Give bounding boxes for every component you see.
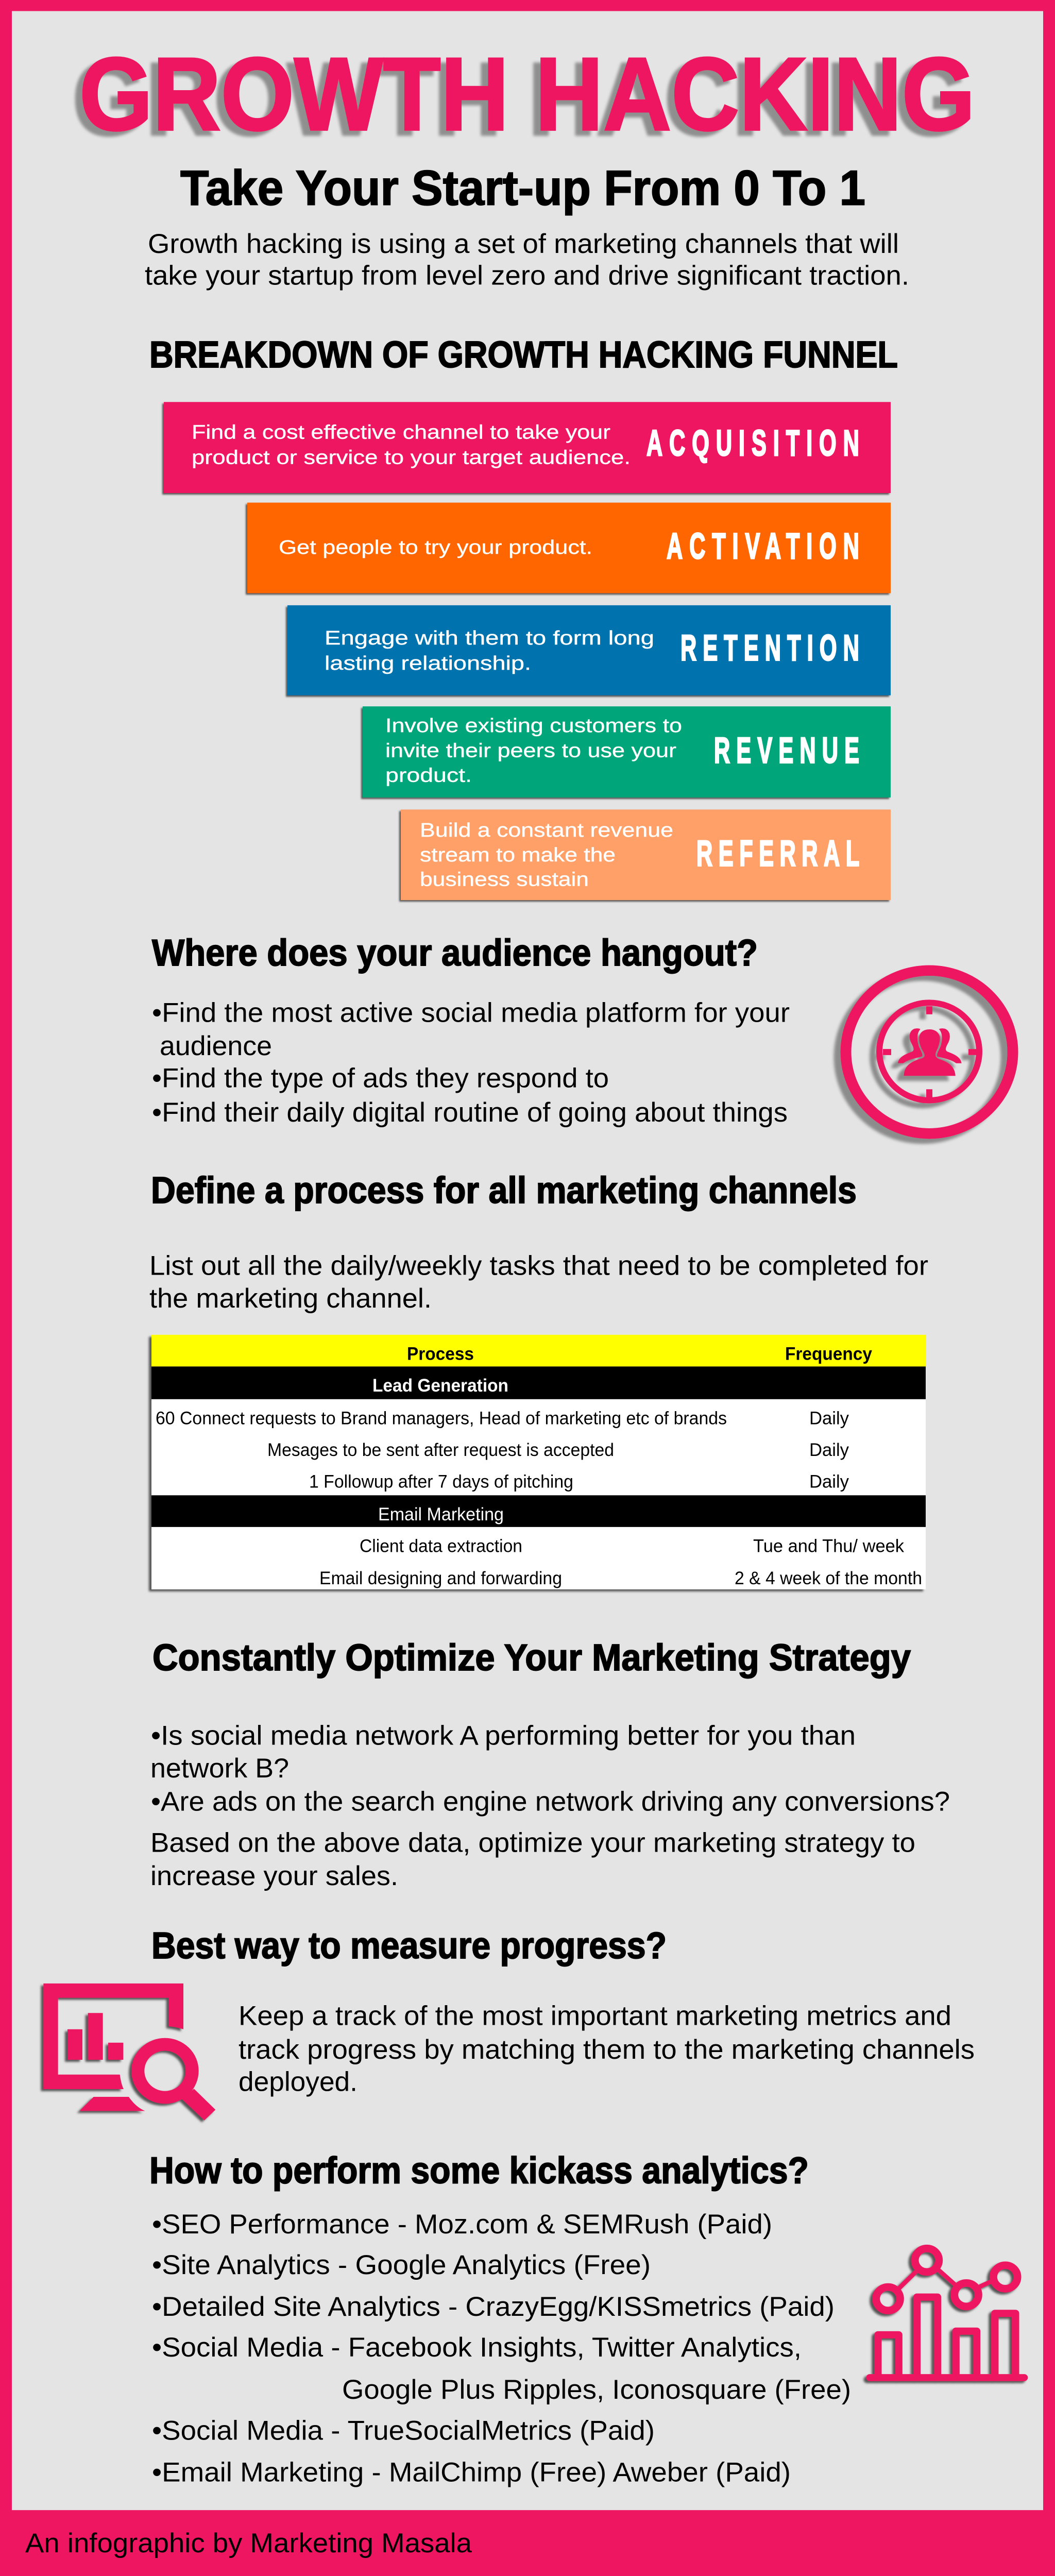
intro text: Growth hacking is using a set of marketing channels that will: [148, 229, 899, 259]
table rows: lead generation: 60 Connect requests to Brand managers, Head of marketing etc of brands: [156, 1408, 727, 1429]
funnel bar: acquisition: [164, 402, 891, 493]
table rows: lead generation: Daily: [809, 1471, 849, 1492]
measure progress text: Keep a track of the most important marketing metrics and: [239, 2001, 951, 2031]
funnel bar: retention: lasting relationship.: [325, 652, 531, 674]
table header row: Process: [407, 1344, 474, 1364]
heading: audience: Where does your audience hangout?: [152, 933, 758, 974]
table rows: email marketing: Email designing and forwarding: [319, 1568, 562, 1588]
analytics tool list: •SEO Performance - Moz.com & SEMRush (Paid): [152, 2210, 772, 2240]
measure progress text: track progress by matching them to the marketing channels: [239, 2035, 975, 2065]
audience bullet list: •Find the most active social media platform for your: [152, 998, 790, 1028]
table rows: email marketing: 2 & 4 week of the month: [735, 1568, 922, 1588]
funnel bar: activation: ACTIVATION: [667, 526, 859, 567]
heading: measure progress: Best way to measure progress?: [151, 1925, 667, 1967]
funnel bar: referral: Build a constant revenue: [420, 819, 673, 841]
funnel bar: referral: [401, 809, 891, 900]
funnel bar: revenue: product.: [385, 765, 472, 786]
analytics tool list: •Site Analytics - Google Analytics (Free): [152, 2250, 651, 2280]
table section: lead generation: Lead Generation: [372, 1376, 508, 1396]
analytics tool list: •Email Marketing - MailChimp (Free) Aweber (Paid): [152, 2458, 791, 2487]
measure progress text: [239, 2001, 975, 2097]
table rows: lead generation: 1 Followup after 7 days of pitching: [309, 1471, 573, 1492]
table header row: [151, 1335, 926, 1366]
audience bullet list: [152, 998, 790, 1128]
funnel bar: revenue: invite their peers to use your: [385, 740, 676, 762]
audience bullet list: •Find their daily digital routine of going about things: [152, 1097, 788, 1128]
heading: funnel breakdown: BREAKDOWN OF GROWTH HACKING FUNNEL: [149, 334, 898, 376]
process intro text: [149, 1251, 928, 1314]
table rows: lead generation: [156, 1408, 849, 1492]
heading: analytics: How to perform some kickass analytics?: [149, 2150, 809, 2191]
table rows: lead generation: Mesages to be sent after request is accepted: [267, 1440, 614, 1460]
table rows: email marketing: [319, 1536, 922, 1588]
funnel bar: referral: REFERRAL: [696, 834, 859, 874]
audience bullet list: •Find the type of ads they respond to: [152, 1063, 609, 1093]
table header row: Frequency: [785, 1344, 872, 1364]
heading: optimize: Constantly Optimize Your Marketing Strategy: [152, 1637, 911, 1679]
optimize text block: •Is social media network A performing better for you than: [151, 1721, 856, 1751]
measure progress text: deployed.: [239, 2067, 358, 2097]
intro text: [145, 229, 909, 291]
icon: audience target: [846, 971, 1013, 1133]
funnel bar: referral: stream to make the: [420, 844, 616, 866]
funnel bar: retention: Engage with them to form long: [325, 627, 654, 649]
table rows: lead generation: Daily: [809, 1408, 849, 1429]
subtitle: Take Your Start-up From 0 To 1: [180, 160, 865, 215]
process intro text: List out all the daily/weekly tasks that need to be completed for: [149, 1251, 928, 1281]
optimize text block: Based on the above data, optimize your marketing strategy to: [150, 1828, 915, 1858]
optimize text block: [150, 1721, 950, 1891]
funnel bar: activation: [247, 503, 891, 593]
table rows: email marketing: Client data extraction: [360, 1536, 522, 1556]
optimize text block: network B?: [150, 1754, 289, 1784]
funnel bar: acquisition: product or service to your target audience.: [192, 447, 631, 468]
analytics tool list: •Social Media - Facebook Insights, Twitter Analytics,: [152, 2333, 802, 2363]
funnel bar: acquisition: Find a cost effective channel to take your: [192, 421, 610, 443]
heading: process: Define a process for all marketing channels: [151, 1170, 857, 1211]
table section: email marketing: [151, 1495, 926, 1527]
funnel bar: revenue: REVENUE: [714, 731, 859, 771]
funnel bar: referral: business sustain: [420, 869, 589, 891]
analytics tool list: •Social Media - TrueSocialMetrics (Paid): [152, 2416, 655, 2446]
audience bullet list: audience: [160, 1031, 272, 1061]
funnel bar: activation: Get people to try your product.: [279, 537, 592, 558]
funnel bar: acquisition: ACQUISITION: [646, 423, 859, 463]
funnel bar: retention: [287, 605, 891, 696]
table section: email marketing: Email Marketing: [378, 1504, 504, 1524]
optimize text block: •Are ads on the search engine network driving any conversions?: [151, 1787, 950, 1817]
analytics tool list: [152, 2210, 851, 2487]
funnel bar: retention: RETENTION: [680, 628, 859, 668]
optimize text block: increase your sales.: [150, 1861, 398, 1891]
footer credit: An infographic by Marketing Masala: [25, 2529, 472, 2558]
table rows: email marketing: Tue and Thu/ week: [753, 1536, 904, 1556]
panel: funnel: [164, 402, 891, 900]
table section: lead generation: [151, 1366, 926, 1399]
funnel bar: revenue: [363, 706, 891, 798]
process intro text: the marketing channel.: [149, 1284, 432, 1314]
analytics tool list: Google Plus Ripples, Iconosquare (Free): [342, 2375, 851, 2405]
intro text: take your startup from level zero and drive significant traction.: [145, 261, 909, 291]
icon: monitor with magnifier: [43, 1984, 215, 2121]
funnel bar: revenue: Involve existing customers to: [385, 715, 682, 737]
icon: analytics chart: [870, 2248, 1024, 2378]
table: process and frequency: [151, 1335, 926, 1589]
analytics tool list: •Detailed Site Analytics - CrazyEgg/KISSmetrics (Paid): [152, 2292, 835, 2322]
table rows: lead generation: Daily: [809, 1440, 849, 1460]
